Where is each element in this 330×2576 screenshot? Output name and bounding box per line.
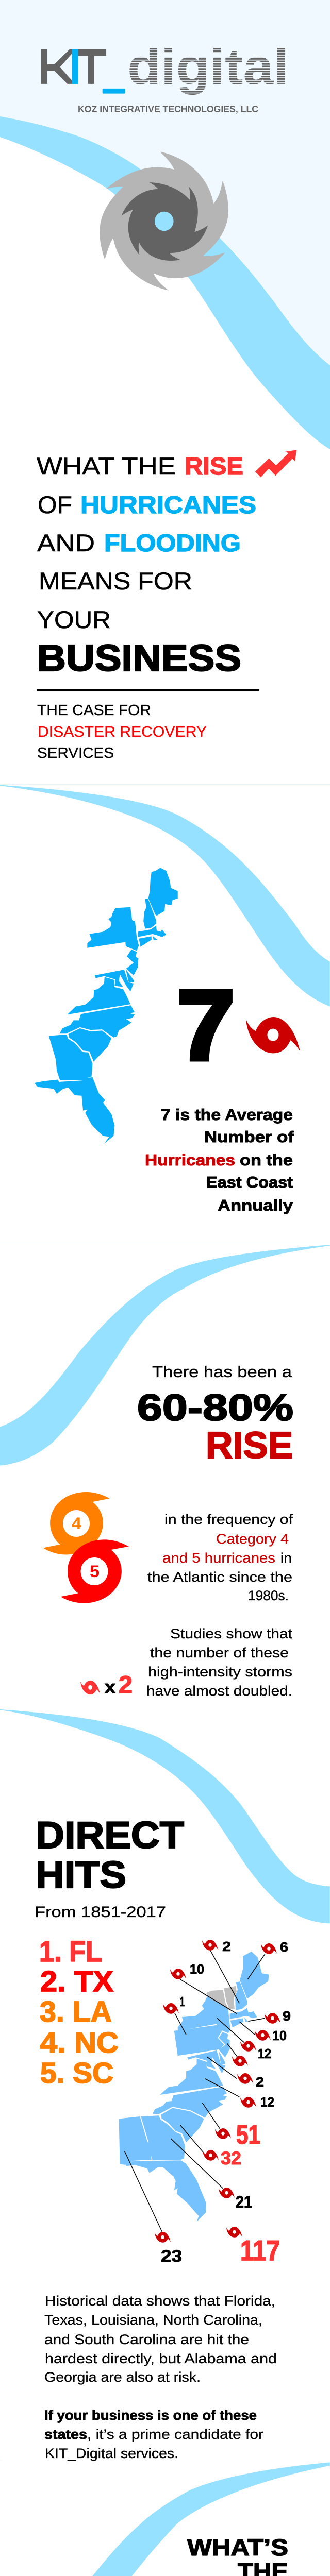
hurricane markers (155, 1940, 280, 2243)
subtitle: SERVICES (37, 745, 114, 761)
state hit counts: 117 (240, 2234, 280, 2266)
text: prime candidate (44, 2408, 263, 2461)
subtitle: THE CASE FOR (37, 702, 151, 719)
ranking list: 3. LA (40, 1995, 112, 2028)
icon: red hurricane (246, 1017, 300, 1053)
state hit counts: 10 (190, 1961, 204, 1977)
heading: direct hits: HITS (36, 1854, 126, 1896)
company name: KOZ INTEGRATIVE TECHNOLOGIES, LLC (78, 104, 258, 114)
heading: direct hits: DIRECT (36, 1815, 184, 1856)
state hit counts: 6 (280, 1939, 288, 1955)
text: historical data (44, 2293, 277, 2385)
text: frequency: 1980s. (248, 1588, 289, 1603)
subtitle: DISASTER RECOVERY (38, 724, 207, 740)
text: prime candidate: , it’s a prime candidate for (87, 2427, 263, 2442)
text: seven hurricanes: Hurricanes (145, 1151, 235, 1169)
title: OF (38, 491, 72, 518)
logo word digital: digital (127, 38, 289, 95)
big number 7: 7 (177, 970, 235, 1080)
title: RISE (185, 452, 243, 480)
icon: doubled hurricanes: 2 (119, 1671, 133, 1698)
icon: category 4: 4 (72, 1514, 81, 1533)
text: frequency: Category 4 (216, 1531, 289, 1547)
text: studies: the number of these (150, 1645, 289, 1660)
text: historical data: Texas, Louisiana, North Carolina, (44, 2312, 262, 2328)
state hit counts: 51 (236, 2120, 260, 2150)
heading: what's the damage: WHAT’S (187, 2534, 288, 2561)
wave band 4 (0, 1709, 330, 1923)
map: direct hits by state (119, 1939, 291, 2266)
ranking list: 2. TX (40, 1965, 113, 1998)
text: studies (146, 1626, 293, 1699)
callout lines (125, 1951, 265, 2232)
text: frequency: in (280, 1550, 292, 1566)
ranking list: 4. NC (40, 2026, 119, 2059)
title: BUSINESS (37, 638, 241, 679)
stat: 60-80% rise: RISE (206, 1425, 293, 1466)
states (119, 1952, 269, 2222)
icon: category 5 (61, 1539, 129, 1603)
text: historical data: Historical data shows that Florida, (45, 2293, 275, 2309)
subtitle (37, 702, 207, 761)
logo (41, 38, 289, 114)
stat: 60-80% rise (137, 1363, 293, 1466)
state hit counts: 23 (161, 2247, 182, 2265)
wave band 2 (0, 785, 330, 1007)
title: AND (37, 529, 95, 556)
icon: category 4 (43, 1492, 110, 1554)
state hit counts: 2 (256, 2074, 264, 2090)
stat: 60-80% rise: There has been a (152, 1363, 292, 1381)
text: frequency: the Atlantic since the (147, 1569, 292, 1585)
text: studies: high-intensity storms (148, 1664, 292, 1680)
text: historical data: and South Carolina are hit the (44, 2332, 249, 2347)
text: frequency: and 5 hurricanes (162, 1550, 275, 1566)
icon: hurricane (100, 152, 228, 291)
wave band 1 (0, 116, 330, 449)
title: YOUR (37, 606, 111, 633)
title: HURRICANES (80, 491, 256, 518)
text: prime candidate: KIT_Digital services. (45, 2446, 178, 2461)
stat: 60-80% rise: 60-80% (137, 1387, 293, 1429)
title: WHAT THE (37, 452, 176, 480)
icon: category 5: 5 (90, 1562, 100, 1581)
text: seven hurricanes: East Coast (206, 1173, 293, 1191)
header background (0, 0, 330, 365)
text: studies: have almost doubled. (146, 1683, 292, 1699)
ranking list: 5. SC (40, 2057, 113, 2090)
state hit counts: 9 (283, 2008, 291, 2024)
icon: doubled hurricanes (80, 1671, 133, 1698)
ranking list (39, 1935, 119, 2090)
map: east coast states (35, 868, 178, 1144)
logo mark KIT (41, 49, 125, 94)
title: FLOODING (104, 529, 241, 556)
state hit counts (161, 1939, 291, 2266)
heading: what's the damage (164, 2534, 288, 2576)
text: seven hurricanes: on the (240, 1151, 293, 1169)
text: frequency: in the frequency of (164, 1512, 293, 1527)
state hit counts: 12 (260, 2094, 274, 2110)
wave band 5 (1, 2462, 330, 2576)
text: seven hurricanes: Annually (218, 1196, 293, 1214)
icon: category 4 and 5 hurricanes (43, 1492, 129, 1603)
text: prime candidate: If your business is one of these (44, 2408, 257, 2423)
heading: direct hits: From 1851-2017 (35, 1904, 166, 1921)
state hit counts: 12 (258, 2046, 271, 2061)
state hit counts: 32 (221, 2148, 241, 2168)
state hit counts: 2 (222, 1939, 231, 1954)
text: studies: Studies show that (170, 1626, 293, 1641)
title: MEANS FOR (39, 567, 192, 595)
text: seven hurricanes (145, 1106, 294, 1214)
text: seven hurricanes: 7 is the Average (161, 1106, 293, 1124)
wave band 3 (0, 1245, 330, 1466)
ranking list: 1. FL (39, 1935, 102, 1968)
text: prime candidate: states (44, 2427, 87, 2442)
state hit counts: 10 (272, 2028, 287, 2043)
icon: doubled hurricanes: x (105, 1677, 116, 1697)
text: historical data: Georgia are also at risk. (44, 2369, 201, 2385)
icon: rising arrow (255, 450, 296, 477)
text: historical data: hardest directly, but Alabama and (45, 2351, 277, 2366)
text: frequency (147, 1512, 293, 1603)
heading: direct hits (35, 1815, 184, 1921)
state hit counts: 21 (236, 2193, 252, 2211)
state hit counts: 1 (180, 1994, 185, 2009)
title (37, 452, 256, 679)
text: seven hurricanes: Number of (204, 1128, 294, 1146)
